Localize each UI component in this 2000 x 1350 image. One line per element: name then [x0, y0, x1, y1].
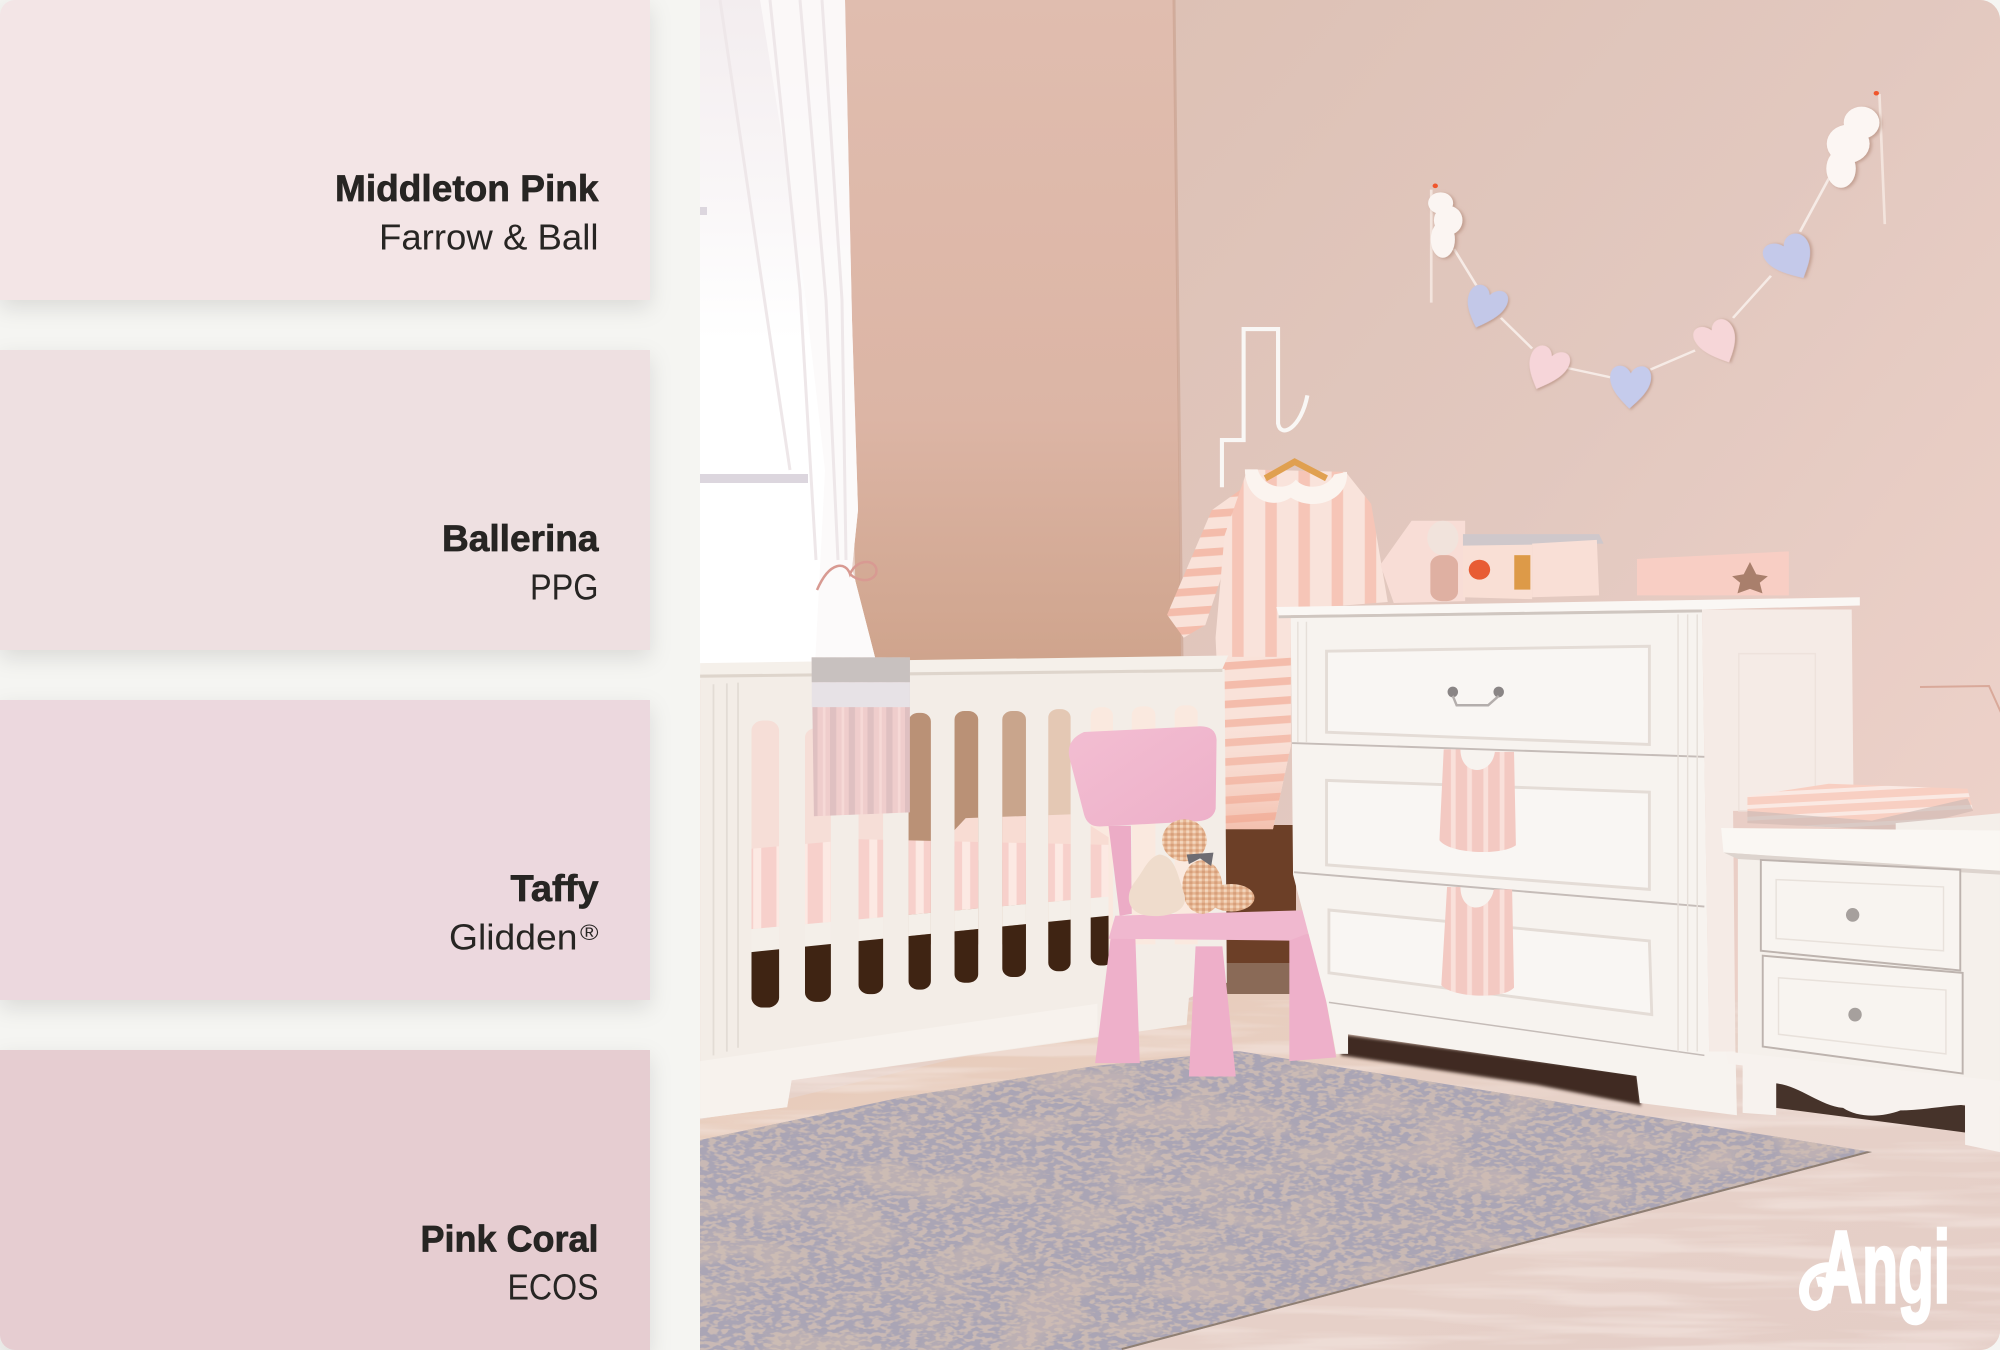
- items on dresser: [1380, 521, 1789, 603]
- hanger wire: [1222, 329, 1307, 487]
- crib left panel grooves: [713, 683, 738, 1055]
- crib: [700, 655, 1336, 1119]
- gown body: [1216, 469, 1388, 829]
- nightstand shadow: [1776, 1081, 1965, 1132]
- hanging bib lower: [1441, 887, 1514, 996]
- folded towels: [1747, 784, 2000, 833]
- heart lilac right: [1759, 230, 1824, 288]
- dresser top: [1276, 597, 1860, 615]
- wall corner line: [1174, 0, 1182, 660]
- hanging towel: [812, 657, 910, 816]
- baby gown: [1167, 329, 1388, 829]
- window frame bars: [700, 207, 808, 483]
- heart pink left: [1518, 343, 1574, 395]
- nightstand: [1721, 784, 2000, 1152]
- drawer inner panels: [1776, 880, 1946, 1054]
- front grooves: [1298, 614, 1697, 1051]
- panel: swatch Pink Coral: [0, 1050, 650, 1350]
- soft cushion: [1532, 540, 1599, 597]
- star ornament: [1732, 562, 1768, 593]
- nightstand drawers: [1761, 860, 1963, 1074]
- chair seat: [1109, 910, 1314, 941]
- hanging bib upper: [1439, 749, 1516, 852]
- right wall: [1174, 0, 2000, 1000]
- brand: Farrow & Ball: [379, 216, 598, 258]
- brand: ®: [580, 920, 598, 945]
- chair back: [1069, 726, 1217, 827]
- floor wood grain: [700, 1000, 2000, 1350]
- shadow under dresser: [1341, 1034, 1641, 1105]
- color name: Middleton Pink: [335, 168, 599, 209]
- soft jar toy: [1463, 534, 1604, 599]
- drawer gaps: [1292, 743, 1704, 1055]
- Angi logo: [1804, 1212, 1950, 1324]
- dresser front: [1291, 610, 1737, 1115]
- drawer panels: [1327, 646, 1652, 1015]
- sleeve left: [1167, 490, 1240, 638]
- hanger: [1265, 462, 1327, 478]
- panel: swatch Ballerina: [0, 350, 650, 650]
- bunting strings: [1454, 178, 1829, 377]
- nightstand body: [1738, 855, 2000, 1091]
- drawer handle: [1448, 687, 1504, 705]
- nightstand top: [1721, 828, 2000, 872]
- pear plush: [1129, 854, 1185, 916]
- pink box: [1637, 551, 1789, 595]
- pink chair: [1069, 726, 1336, 1076]
- crib top rail: [700, 655, 1228, 675]
- chair legs: [1095, 937, 1140, 1063]
- color name: Taffy: [510, 868, 599, 909]
- color name: Pink Coral: [420, 1218, 598, 1260]
- cloud small: [1428, 192, 1462, 258]
- brand: Glidden: [449, 916, 578, 958]
- dresser: [1276, 597, 1860, 1115]
- brand: ECOS: [508, 1266, 598, 1308]
- hanging ribbons: [1431, 94, 1885, 303]
- plush mouse: [1427, 521, 1458, 601]
- crib body: [700, 669, 1227, 1119]
- floor: [700, 990, 2000, 1350]
- panel: swatch Middleton Pink: [0, 0, 650, 300]
- wall bunting: [1428, 91, 1885, 409]
- heart pink right: [1690, 316, 1748, 370]
- dresser side: [1702, 609, 1854, 1059]
- drawer knobs: [1846, 908, 1859, 922]
- window and sheer curtain: [700, 0, 877, 680]
- heart lilac left: [1457, 282, 1511, 333]
- teddy bear: [1162, 819, 1255, 914]
- wall wire decoration: [1920, 686, 2000, 717]
- nightstand base and feet: [1726, 1051, 2000, 1152]
- crib slot interiors: [752, 709, 1109, 1008]
- heart lilac center: [1609, 365, 1652, 409]
- left wall: [845, 0, 1181, 660]
- panel: swatch Taffy: [0, 700, 650, 1000]
- wall pins: [1433, 184, 1438, 188]
- collar: [1245, 469, 1347, 504]
- nursery photo: [700, 0, 2000, 1350]
- curtain tie: [817, 562, 876, 590]
- rug: [700, 1040, 1900, 1350]
- color name: Ballerina: [442, 518, 599, 559]
- brand: PPG: [530, 566, 598, 608]
- star pillow: [1380, 521, 1465, 603]
- cloud large: [1826, 107, 1879, 188]
- dark wall shadow beside crib: [1222, 825, 1296, 994]
